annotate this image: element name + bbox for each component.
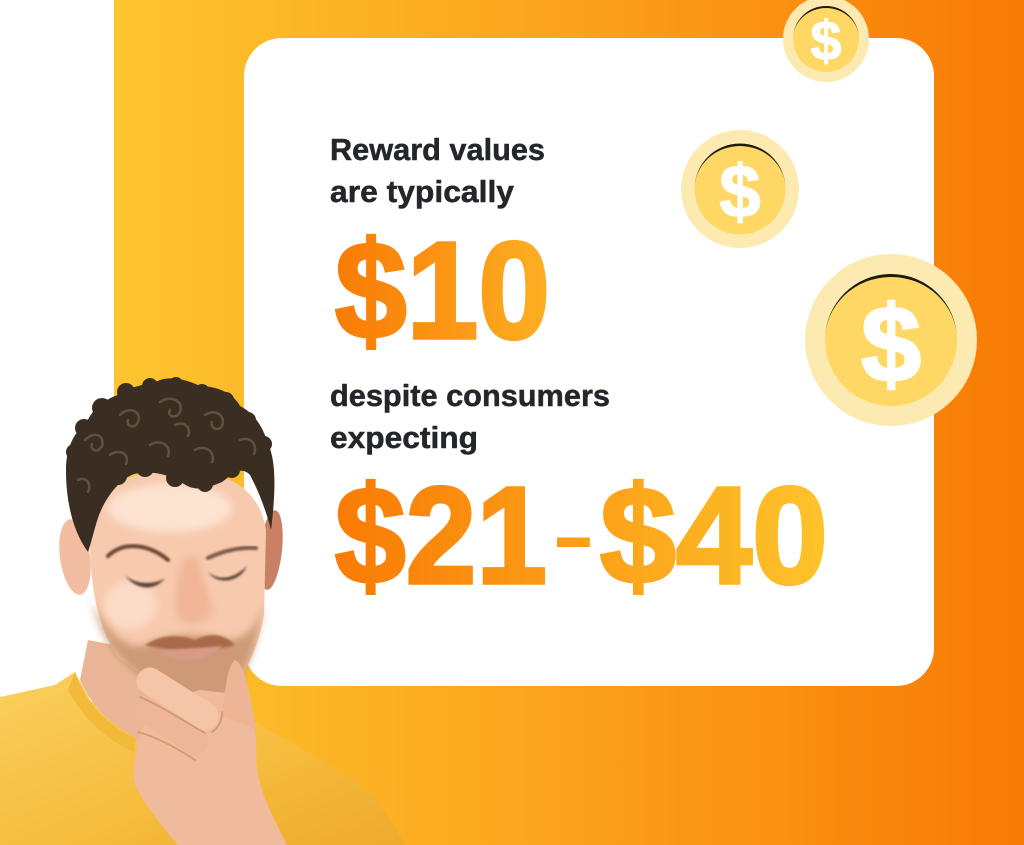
icon: large coin (805, 254, 977, 426)
big number: $21-$40: $40 (600, 459, 828, 613)
hand (134, 660, 287, 845)
face highlights (108, 484, 232, 532)
hair (66, 377, 274, 552)
cheek highlight (104, 581, 156, 629)
icon: medium coin: $ (719, 150, 761, 233)
thumb (222, 660, 256, 730)
right ear (256, 509, 286, 591)
neck (80, 640, 250, 790)
left brow (108, 546, 168, 560)
lips (158, 646, 222, 661)
text: despite consumers expecting: despite consumers (330, 378, 610, 413)
shirt (0, 672, 405, 845)
icon: medium coin (681, 130, 799, 248)
big number: $21-$40: $21 (335, 459, 547, 613)
left ear (55, 517, 95, 597)
text: despite consumers expecting: expecting (330, 420, 478, 455)
icon: large coin: $ (861, 283, 921, 404)
icon: small coin top (783, 0, 869, 82)
beard (92, 600, 264, 706)
left eye (125, 575, 165, 587)
hair curls (78, 399, 255, 492)
nose (175, 555, 214, 624)
moustache and mouth (145, 635, 235, 650)
collar (68, 672, 136, 752)
heading: reward values are typically: Reward values (330, 132, 545, 167)
middle finger (150, 713, 195, 742)
hand body (134, 690, 287, 845)
index finger (150, 681, 205, 716)
icon: small coin top: $ (810, 9, 842, 72)
heading: reward values are typically: are typically (330, 174, 515, 209)
white content card (244, 38, 934, 686)
finger creases (138, 697, 222, 760)
text: despite consumers expecting (330, 378, 610, 455)
face (90, 473, 266, 706)
photo: thoughtful man (0, 377, 405, 845)
right eye (208, 566, 247, 581)
right brow (208, 548, 256, 558)
heading: reward values are typically (330, 132, 545, 209)
big number: $10: $10 (335, 214, 550, 368)
ring finger (150, 747, 195, 772)
big number: $21-$40: - (552, 491, 595, 580)
